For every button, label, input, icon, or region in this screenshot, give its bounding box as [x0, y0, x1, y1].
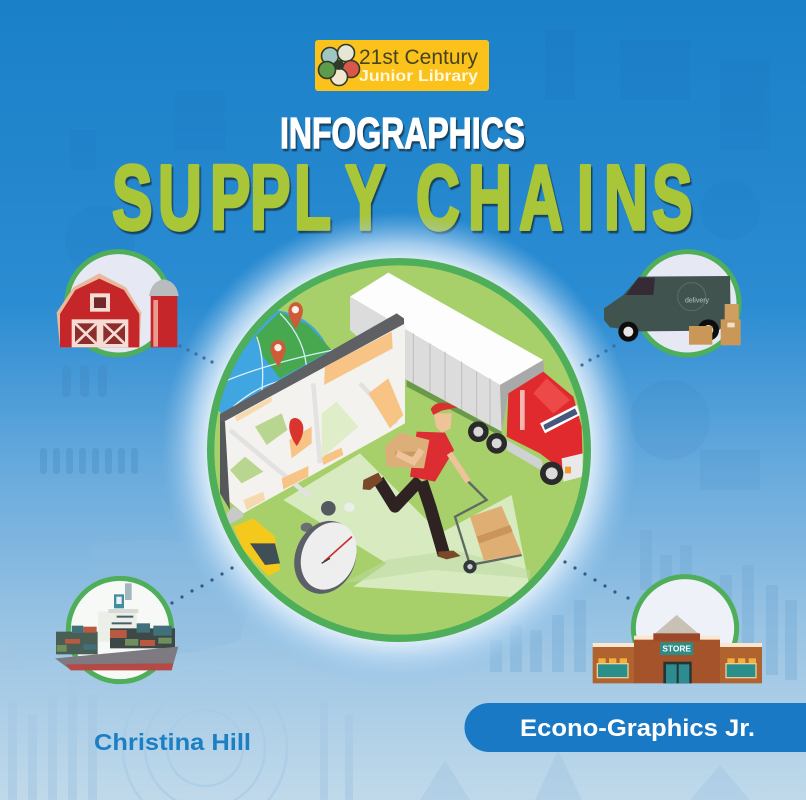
logo badge: 21st Century — [359, 45, 478, 69]
store building: STORE — [662, 644, 691, 654]
heading: supply chains: SUPPLY CHAINS — [112, 145, 693, 249]
silo — [149, 279, 179, 347]
background bar chart left — [8, 680, 353, 800]
central illustration circle — [207, 262, 587, 638]
stopwatch — [294, 501, 357, 594]
central glow — [161, 212, 637, 688]
barn — [57, 273, 141, 347]
background bar chart right — [490, 530, 797, 680]
dotted connector: ship — [170, 566, 234, 605]
truck cab — [507, 372, 583, 482]
heading: infographics: INFOGRAPHICS — [280, 109, 525, 158]
green ring — [211, 262, 587, 638]
ship circle — [55, 578, 178, 682]
truck wheels — [468, 421, 563, 485]
container ship — [55, 583, 178, 670]
parcels — [689, 304, 741, 345]
back leg — [378, 480, 420, 507]
author name: Christina Hill — [94, 729, 251, 755]
logo badge — [315, 40, 489, 91]
torso — [410, 432, 454, 482]
dotted connector: store — [563, 560, 630, 600]
store circle — [593, 577, 762, 683]
van: delivery — [685, 297, 710, 304]
map globe — [218, 310, 334, 414]
hand truck — [455, 480, 522, 565]
dotted connector: van — [580, 344, 616, 367]
barn circle — [57, 252, 179, 355]
van circle — [604, 252, 741, 355]
map pins on globe — [270, 302, 303, 367]
arm — [449, 453, 468, 482]
background rings — [123, 666, 287, 800]
red map pin — [289, 418, 303, 446]
phone with map — [220, 313, 405, 525]
dotted connector: barn — [178, 344, 214, 364]
logo badge: Junior Library — [359, 68, 478, 85]
series pill: Econo-Graphics Jr. — [520, 715, 755, 742]
store building — [593, 615, 762, 683]
series pill — [464, 703, 806, 752]
yellow vehicle — [233, 518, 280, 576]
front leg — [422, 482, 444, 555]
icon: clover flower — [318, 44, 360, 86]
background swoosh — [90, 540, 260, 655]
background people icons — [40, 365, 138, 474]
delivery worker with hand truck — [343, 403, 530, 583]
trailer — [350, 273, 544, 437]
head — [433, 413, 452, 433]
box held — [385, 433, 429, 468]
pale floor light beam — [283, 453, 532, 598]
background triangles — [0, 635, 750, 800]
